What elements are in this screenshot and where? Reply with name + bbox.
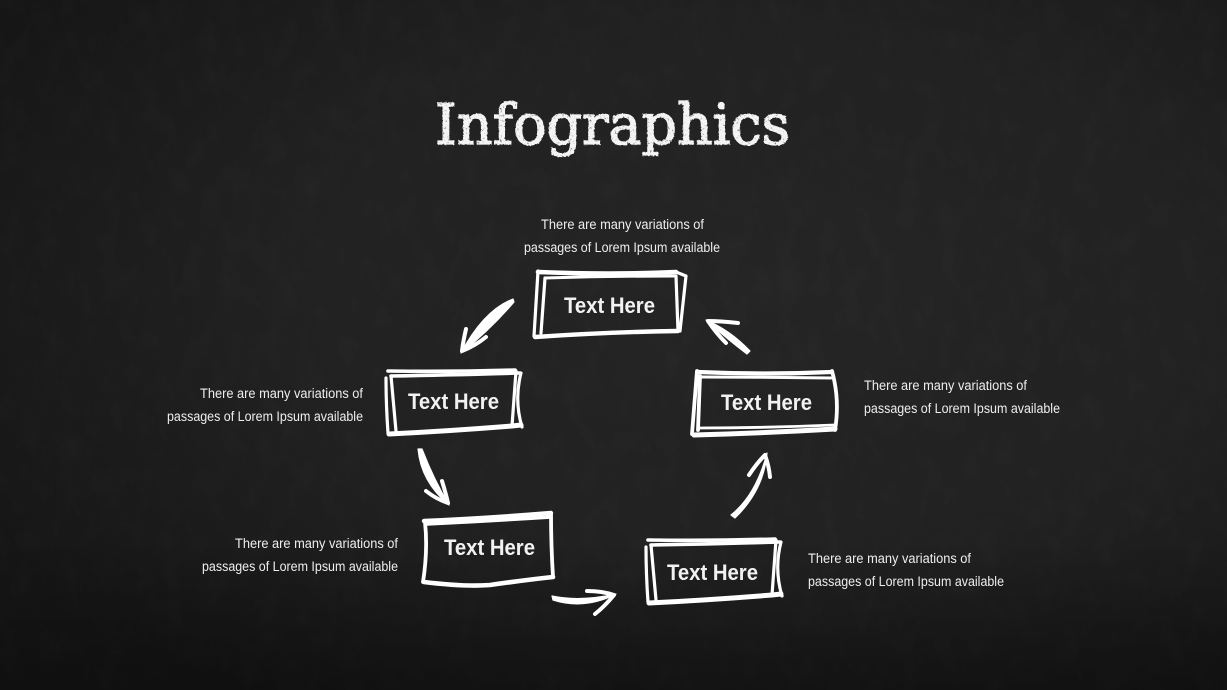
description: bottom right <box>808 551 1004 589</box>
description: bottom left <box>202 536 398 574</box>
description: left: There are many variations of <box>200 386 363 401</box>
arrow: bottom right to right <box>731 453 770 518</box>
description: bottom left: passages of Lorem Ipsum available <box>202 559 398 574</box>
description: left <box>167 386 363 424</box>
description: bottom right: passages of Lorem Ipsum available <box>808 574 1004 589</box>
description: right: There are many variations of <box>864 378 1027 393</box>
box: bottom right <box>646 539 782 603</box>
description: top: There are many variations of <box>541 217 704 232</box>
description: top: passages of Lorem Ipsum available <box>524 240 720 255</box>
label: top box: Text Here <box>564 293 655 318</box>
box: right <box>692 371 837 435</box>
arrow: top to left <box>461 299 514 353</box>
description: left: passages of Lorem Ipsum available <box>167 409 363 424</box>
description: bottom right: There are many variations of <box>808 551 971 566</box>
arrow: bottom left to bottom right <box>552 591 616 614</box>
arrow: right to top <box>706 320 750 354</box>
box: bottom left <box>423 513 553 586</box>
description: top <box>524 217 720 255</box>
arrow: left to bottom left <box>418 449 449 505</box>
box: top <box>534 271 686 337</box>
label: left box: Text Here <box>408 389 499 414</box>
description: right: passages of Lorem Ipsum available <box>864 401 1060 416</box>
title: Infographics <box>435 93 790 158</box>
description: right <box>864 378 1060 416</box>
label: right box: Text Here <box>721 390 812 415</box>
label: bottom left box: Text Here <box>444 535 535 560</box>
box: left <box>386 370 522 434</box>
label: bottom right box: Text Here <box>667 560 758 585</box>
description: bottom left: There are many variations of <box>235 536 398 551</box>
